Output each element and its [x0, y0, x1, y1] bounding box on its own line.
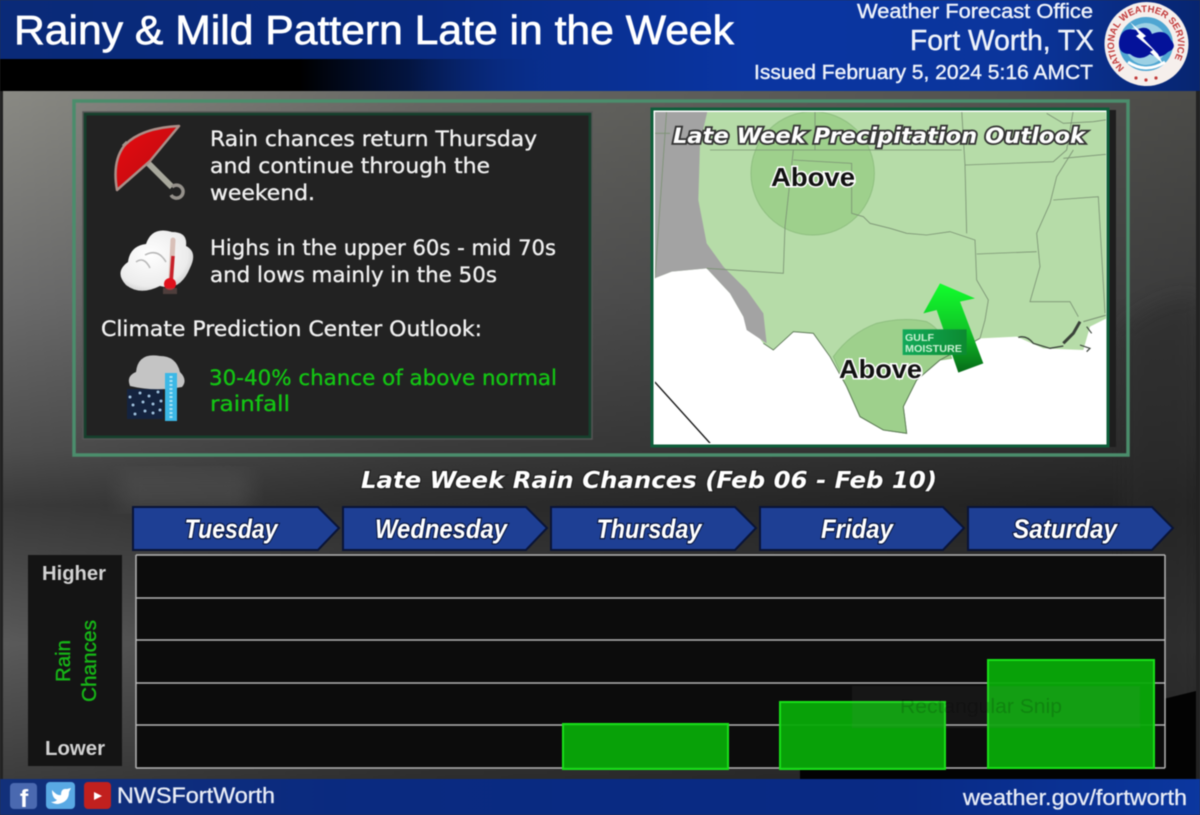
axis label higher: Higher	[42, 562, 106, 585]
icon: cloud with thermometer	[120, 230, 193, 294]
footer url: weather.gov/fortworth	[962, 785, 1187, 810]
snip tooltip ghost	[852, 686, 1140, 728]
map border line in Mexico	[654, 381, 712, 444]
text: highs and lows: Highs in the upper 60s - mid 70s	[210, 236, 556, 260]
gulf moisture label text: MOISTURE	[905, 343, 962, 355]
day arrows	[133, 507, 1173, 550]
footer band	[0, 779, 1200, 815]
text: outlook heading: Climate Prediction Center Outlook:	[101, 317, 482, 341]
office name: Weather Forecast Office	[857, 0, 1093, 23]
map gray area	[650, 100, 767, 343]
icon: rain cloud with gauge	[127, 355, 185, 421]
day: Thursday: Thursday	[596, 514, 703, 544]
rain chance chart	[136, 555, 1165, 769]
snip tooltip ghost: Rectangular Snip	[900, 696, 1062, 718]
axis label lower: Lower	[45, 737, 105, 760]
icon: facebook	[10, 783, 37, 813]
axis label rain: Rain	[53, 640, 75, 682]
text: highs and lows: and lows mainly in the 50s	[210, 263, 497, 287]
day: Friday: Friday	[821, 514, 895, 544]
header band	[0, 0, 1200, 92]
bar: Thursday	[563, 724, 728, 769]
chart heading: Late Week Rain Chances (Feb 06 - Feb 10)	[361, 468, 937, 494]
title: Rainy & Mild Pattern Late in the Week	[14, 7, 735, 53]
text: rain chances: and continue through the	[210, 154, 490, 178]
day: Tuesday	[133, 507, 339, 550]
label: above south: Above	[839, 354, 922, 384]
panel: summary text	[83, 112, 592, 439]
day: Tuesday: Tuesday	[184, 514, 279, 544]
gulf moisture label box	[903, 329, 967, 355]
icon: NWS logo: NATIONAL WEATHER SERVICE	[1106, 4, 1186, 72]
panel: precipitation outlook map	[650, 100, 1117, 447]
day: Saturday	[968, 507, 1173, 550]
map delta coastline	[1018, 315, 1107, 352]
map above-normal north	[751, 112, 874, 235]
icon: youtube	[84, 782, 111, 809]
gulf moisture label text	[905, 332, 962, 355]
label: above north: Above	[771, 162, 855, 192]
arrow: gulf moisture	[903, 283, 983, 373]
footer handle: NWSFortWorth	[117, 783, 275, 808]
icon: twitter	[46, 782, 75, 809]
day: Wednesday: Wednesday	[375, 514, 509, 544]
icon: facebook: f	[20, 785, 29, 813]
icon: red umbrella	[116, 126, 183, 198]
bar: Friday	[780, 702, 945, 769]
text: above normal rainfall: rainfall	[210, 392, 290, 416]
text: rain chances	[210, 127, 537, 205]
gulf moisture label text: GULF	[905, 332, 935, 344]
day: Saturday: Saturday	[1013, 514, 1119, 544]
bar: Saturday	[988, 660, 1154, 768]
map state lines	[650, 110, 1117, 433]
day: Thursday	[551, 507, 756, 550]
day: Friday	[760, 507, 964, 550]
map land	[698, 112, 1106, 374]
map title: Late Week Precipitation Outlook	[673, 124, 1087, 148]
panel frame: green outline	[74, 101, 1128, 455]
text: above normal rainfall	[209, 366, 557, 416]
office city: Fort Worth, TX	[910, 25, 1094, 57]
axis legend	[28, 555, 122, 766]
day: Wednesday	[343, 507, 547, 550]
issued date: Issued February 5, 2024 5:16 AMCT	[754, 61, 1093, 84]
map above-normal south	[833, 320, 952, 433]
text: highs and lows	[210, 236, 556, 287]
axis label chances: Chances	[79, 620, 101, 702]
text: rain chances: weekend.	[210, 181, 315, 205]
text: above normal rainfall: 30-40% chance of above normal	[209, 366, 557, 390]
text: rain chances: Rain chances return Thursday	[210, 127, 537, 151]
